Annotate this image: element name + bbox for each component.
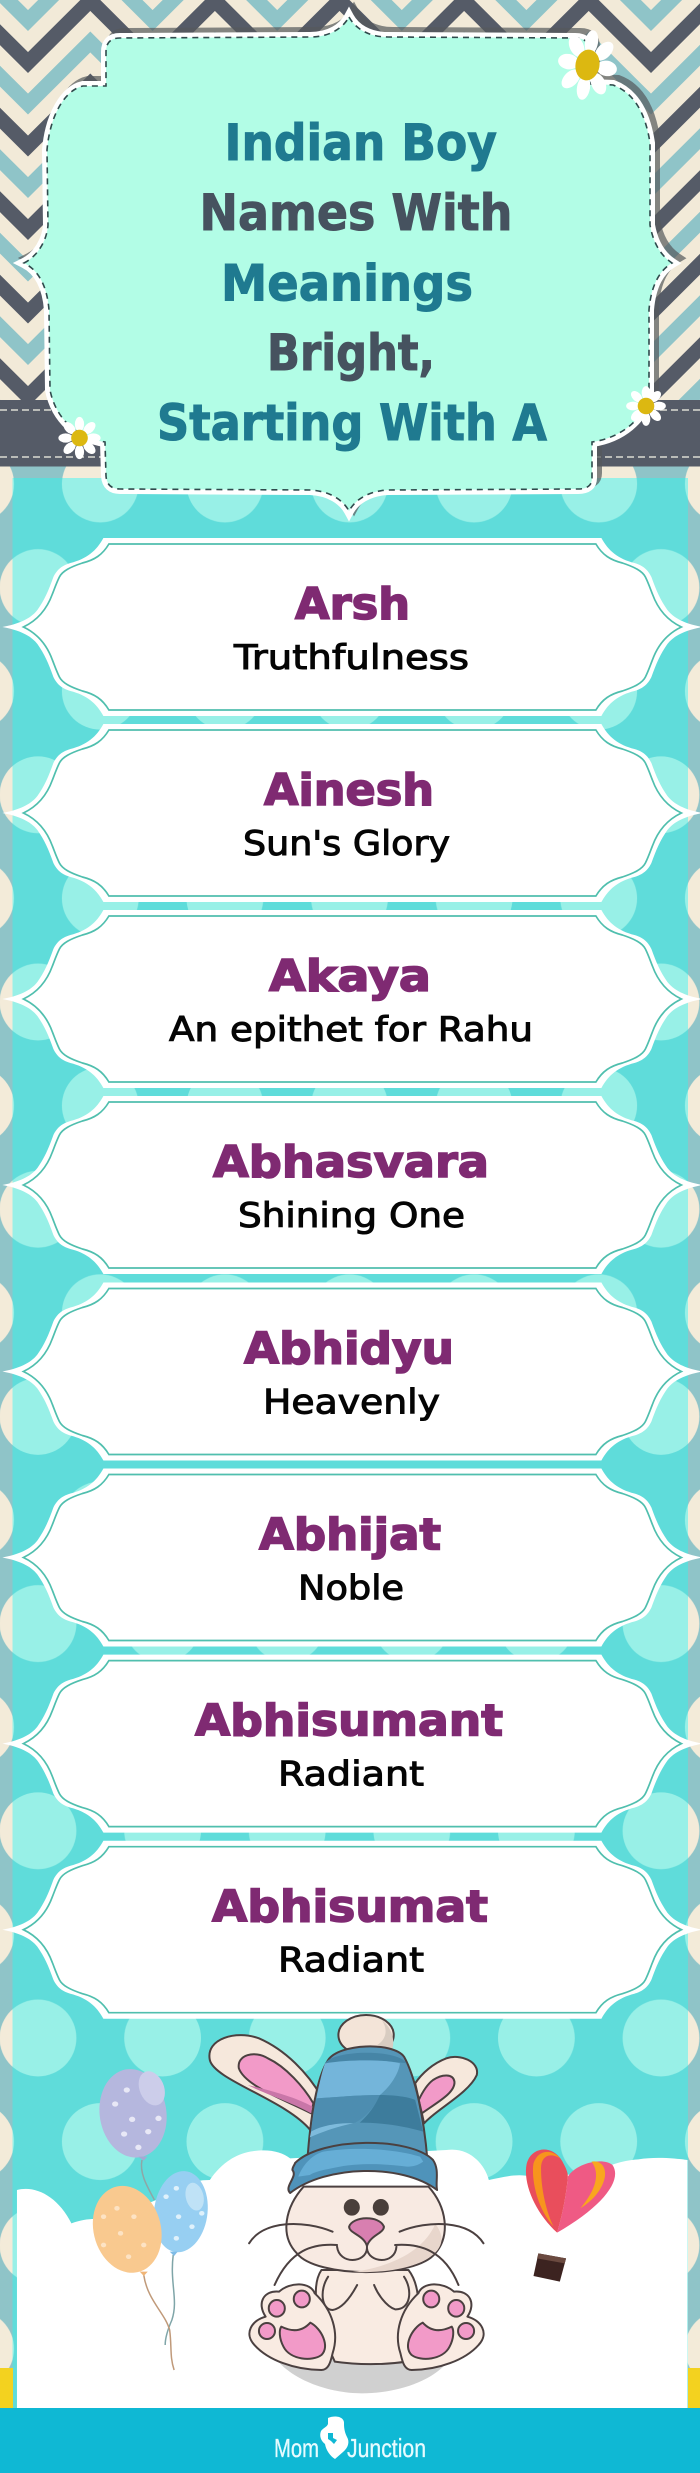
title: Bright, <box>267 324 435 382</box>
right ear <box>415 2057 477 2123</box>
logo: MomJunction <box>274 2416 426 2463</box>
arms <box>323 2277 409 2310</box>
card: Abhijat <box>2 1468 700 1646</box>
card: Abhasvara <box>2 1096 700 1274</box>
card: Arsh: Arsh <box>295 579 410 630</box>
card: Abhisumant: Radiant <box>278 1755 424 1795</box>
card: Abhisumant: Abhisumant <box>195 1696 503 1747</box>
title: Starting With A <box>157 394 547 452</box>
card: Arsh: Truthfulness <box>233 638 469 678</box>
grey stitched band <box>0 400 700 466</box>
card: Abhisumant <box>2 1655 700 1833</box>
icon: daisy bottom left <box>58 417 101 459</box>
logo: MomJunction: Mom <box>274 2433 319 2463</box>
card: Abhasvara: Shining One <box>238 1196 465 1236</box>
shadow <box>270 2350 446 2393</box>
card: Abhisumat <box>2 1841 700 2019</box>
icon: mother and child <box>320 2416 348 2459</box>
balloon: blue <box>150 2170 211 2345</box>
icon: daisy right <box>626 386 666 426</box>
card: Akaya: An epithet for Rahu <box>169 1010 533 1050</box>
card: Abhidyu <box>2 1282 700 1460</box>
title: Meanings <box>221 254 473 312</box>
card: Ainesh: Sun's Glory <box>243 824 450 864</box>
title: Indian Boy <box>224 114 497 172</box>
icon: daisy top right <box>552 25 623 105</box>
left ear <box>209 2035 321 2130</box>
card: Abhidyu: Abhidyu <box>244 1324 454 1374</box>
background: chevron pattern <box>0 0 700 400</box>
card: Ainesh <box>2 724 700 902</box>
card: Akaya: Akaya <box>269 951 431 1002</box>
card: Ainesh: Ainesh <box>264 765 434 816</box>
feet <box>249 2284 484 2370</box>
card: Akaya <box>2 910 700 1088</box>
pom-pom <box>338 2015 394 2055</box>
card: Abhijat: Abhijat <box>259 1510 441 1560</box>
clouds <box>17 2150 688 2408</box>
card: Abhidyu: Heavenly <box>263 1382 440 1422</box>
illustration: clouds, balloons, rabbit and heart balloon <box>17 2015 688 2408</box>
background: polka dot panel <box>0 466 700 2408</box>
rabbit <box>209 2015 484 2393</box>
basket <box>533 2253 566 2282</box>
title: Names With <box>200 184 512 242</box>
head <box>286 2187 445 2272</box>
footer bar <box>0 2408 700 2473</box>
balloon: orange <box>86 2183 174 2370</box>
card: Abhisumat: Radiant <box>278 1941 424 1981</box>
card: Abhijat: Noble <box>298 1568 404 1608</box>
hat <box>288 2046 437 2193</box>
card: Arsh <box>2 538 700 716</box>
logo: MomJunction: Junction <box>347 2433 426 2463</box>
face <box>249 2199 483 2285</box>
title <box>157 114 547 452</box>
panel: title frame <box>24 12 677 511</box>
balloon: purple <box>95 2067 171 2200</box>
heart balloon <box>526 2150 615 2282</box>
body <box>316 2270 418 2364</box>
card: Abhisumat: Abhisumat <box>212 1882 488 1933</box>
card: Abhasvara: Abhasvara <box>213 1137 489 1188</box>
